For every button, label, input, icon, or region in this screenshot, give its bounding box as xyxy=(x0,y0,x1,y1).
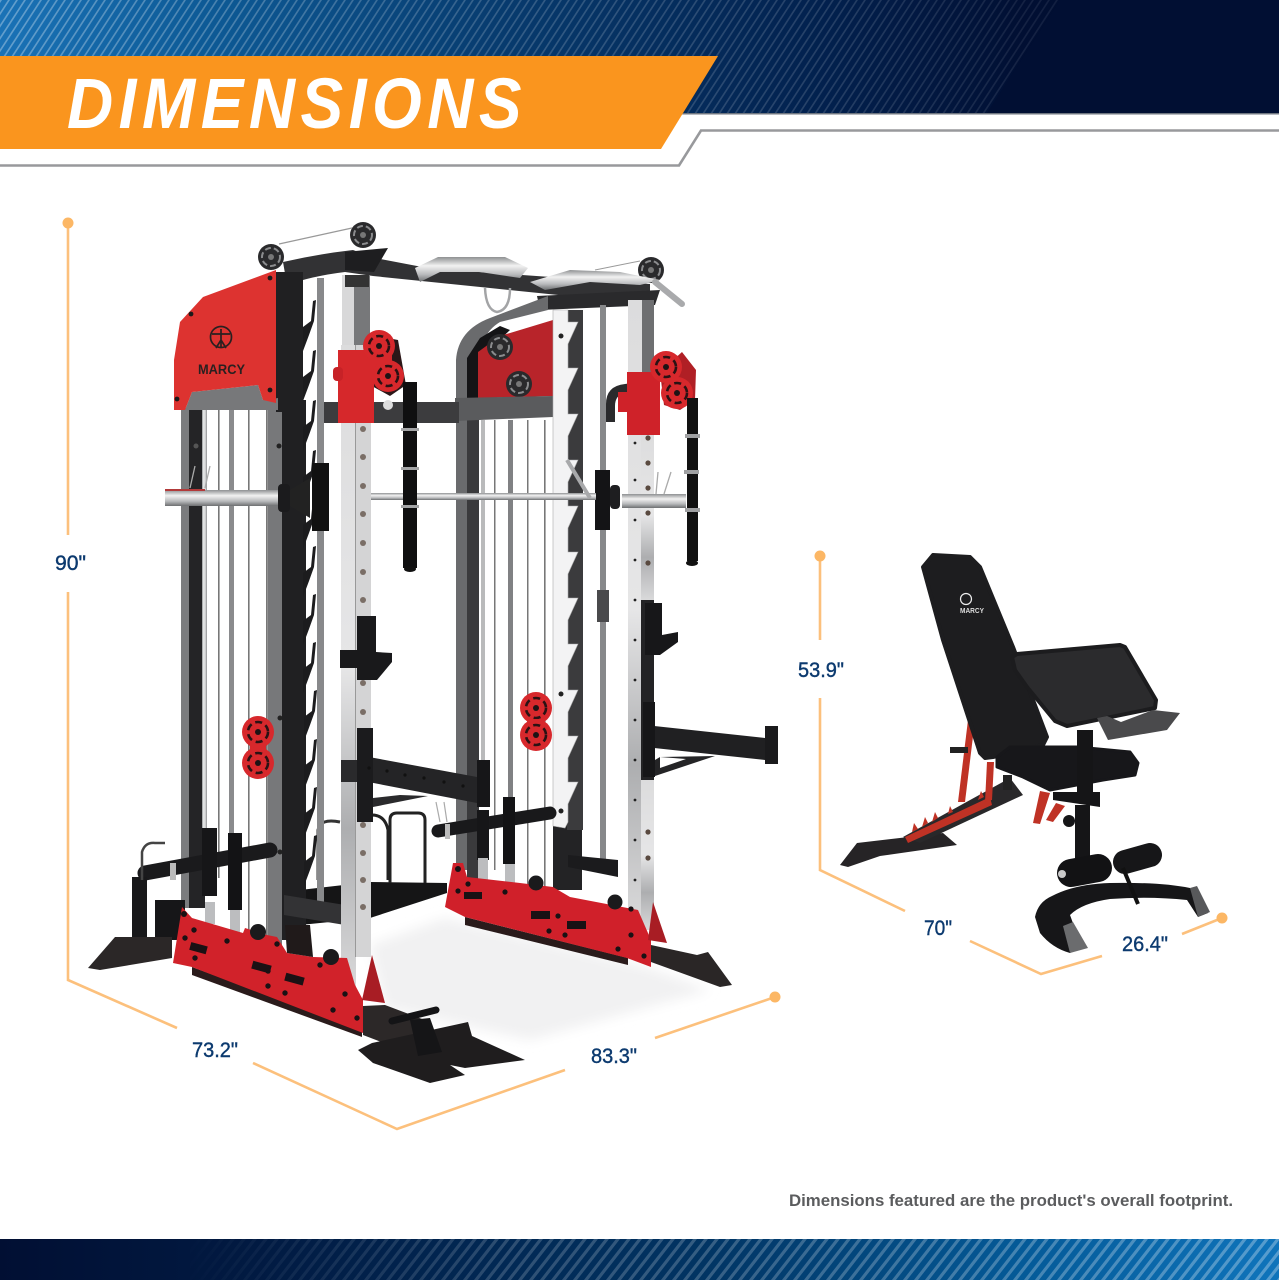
title: DIMENSIONS xyxy=(67,65,522,144)
preacher pad xyxy=(1012,645,1156,726)
left guide rod xyxy=(284,278,345,925)
dimension label: bench height: 53.9" xyxy=(798,659,844,682)
orange title band xyxy=(0,56,718,149)
main rail xyxy=(903,778,1023,843)
right guide rod xyxy=(568,305,618,877)
low red pulleys: right xyxy=(520,692,552,751)
right front foot xyxy=(651,945,732,987)
red base plate: left xyxy=(173,907,363,1033)
right floor beam xyxy=(465,917,628,965)
rear storage base xyxy=(300,813,447,925)
right safety spotter arm xyxy=(643,702,778,777)
rear foot xyxy=(840,833,957,867)
top pulleys xyxy=(258,222,664,283)
center front column xyxy=(341,275,371,990)
foot rollers xyxy=(1058,855,1150,904)
front arc base xyxy=(1035,883,1210,953)
left side foot xyxy=(88,937,172,970)
footer banner xyxy=(0,1239,1279,1280)
left weight sleeve assembly xyxy=(132,828,270,940)
floor shadow xyxy=(370,918,710,1040)
left tower front upright xyxy=(268,272,306,950)
red logo panel xyxy=(174,270,278,410)
dimension lines: gym xyxy=(62,218,780,1129)
right front column xyxy=(628,300,654,930)
right tower cables and rods xyxy=(481,420,546,890)
left weight hooks xyxy=(303,300,317,886)
red gusset: right xyxy=(648,902,667,943)
front-left floor beam xyxy=(192,967,362,1037)
backrest struts xyxy=(958,720,994,802)
dimension label: width 73.2: 73.2" xyxy=(192,1039,238,1062)
backrest logo: MARCY xyxy=(960,608,984,615)
adjustment knob xyxy=(950,747,968,753)
low red pulleys: left xyxy=(242,716,274,779)
preacher arm tray xyxy=(1097,710,1180,740)
red levers xyxy=(1033,791,1065,824)
top frame xyxy=(283,248,660,310)
dimension label: bench width: 26.4" xyxy=(1122,933,1168,956)
header outline stroke xyxy=(0,130,1279,166)
left carriage and pulleys xyxy=(333,330,419,572)
seat pad xyxy=(997,747,1138,790)
dimension label: height 90: 90" xyxy=(55,552,86,575)
backrest logo xyxy=(960,594,984,615)
right carriage and pulleys xyxy=(606,351,700,566)
dimension lines: bench xyxy=(814,550,1228,974)
right rear arch xyxy=(319,296,553,900)
backrest pad xyxy=(923,555,1047,758)
red logo panel: MARCY xyxy=(198,362,245,377)
header banner xyxy=(0,0,1279,114)
red base plate: right xyxy=(445,863,651,967)
lower seat frame xyxy=(1003,775,1012,790)
dimension label: bench length: 70" xyxy=(924,917,952,940)
red gusset: left xyxy=(362,955,385,1003)
support post xyxy=(1053,730,1100,860)
left strap xyxy=(401,382,419,572)
dimension label: depth 83.3: 83.3" xyxy=(591,1045,637,1068)
right weight hooks column xyxy=(553,310,583,890)
left tower rear upright xyxy=(181,408,205,908)
marcy logo xyxy=(210,326,232,348)
front foot pedal xyxy=(358,1005,525,1083)
right j-hook xyxy=(645,603,678,655)
adjustable bench illustration xyxy=(840,555,1210,953)
left j-hook xyxy=(340,616,392,680)
right weight sleeve assembly xyxy=(436,797,550,886)
adjustment rack xyxy=(905,791,992,843)
red back panel xyxy=(478,320,553,398)
smith machine illustration xyxy=(88,222,778,1083)
left tower cables and rods xyxy=(202,408,268,938)
right strap xyxy=(684,398,700,566)
left spotter arm xyxy=(341,728,490,822)
barbell xyxy=(165,460,686,531)
footnote: Dimensions featured are the product's overall footprint. xyxy=(789,1191,1233,1210)
lat pull-down bars xyxy=(415,257,682,312)
